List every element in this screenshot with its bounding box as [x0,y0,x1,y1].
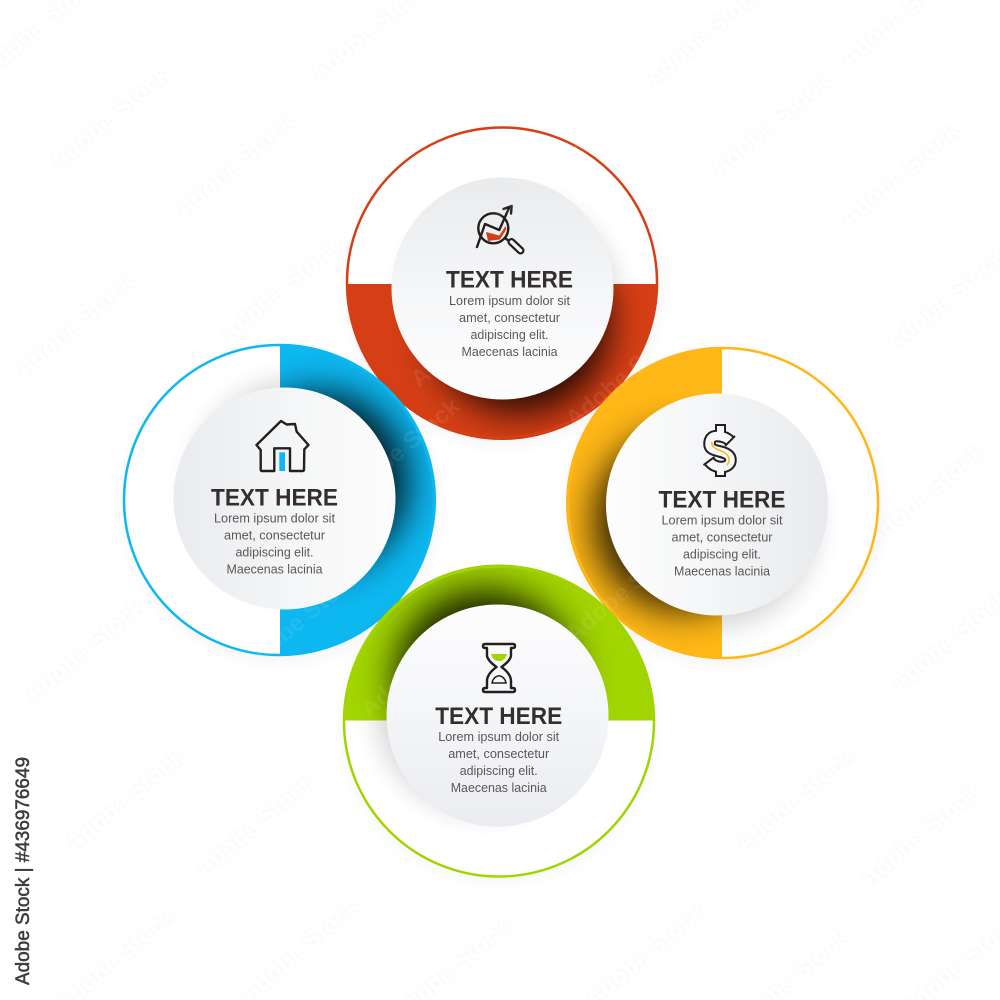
watermark pattern: Adobe Stock [170,107,301,223]
text block: Lorem ipsum dolor sit [662,512,783,528]
watermark overlay: Adobe Stock [560,532,691,648]
text block: adipiscing elit. [460,763,538,778]
text block: amet, consectetur [224,528,326,542]
watermark pattern: Adobe Stock [60,742,191,858]
watermark pattern: Adobe Stock [215,232,346,348]
icon: hourglass [483,644,515,692]
text block: amet, consectetur [459,310,561,325]
watermark pattern: Adobe Stock [860,437,991,553]
icon: house [256,421,308,471]
text block: Maecenas lacinia [451,780,547,795]
stock id side label: Adobe Stock | #436976649 [13,757,34,985]
text block [438,729,560,795]
watermark overlay: Adobe Stock [235,562,366,678]
watermark overlay: Adobe Stock [485,112,616,228]
panel: orange circle [566,347,880,663]
watermark pattern: Adobe Stock [10,267,141,383]
panel: green circle [343,564,655,881]
watermark overlay [235,112,691,723]
text block: Maecenas lacinia [462,344,558,359]
watermark overlay: Adobe Stock [355,607,486,723]
heading: TEXT HERE [658,486,786,514]
text block: adipiscing elit. [236,544,314,560]
icon: chart magnifier [477,206,520,250]
watermark overlay: Adobe Stock [560,317,691,433]
watermark pattern: Adobe Stock [45,60,176,176]
heading: TEXT HERE [435,703,562,730]
panel: blue circle [123,344,436,660]
text block: Lorem ipsum dolor sit [449,293,570,308]
text block: Maecenas lacinia [226,562,323,576]
panel: red circle [346,126,659,443]
text block: Lorem ipsum dolor sit [214,510,335,526]
text block: amet, consectetur [448,746,550,761]
text block [214,510,335,576]
watermark pattern: Adobe Stock [730,742,861,858]
text block: Lorem ipsum dolor sit [438,729,560,744]
watermark overlay: Adobe Stock [405,277,536,393]
watermark pattern: Adobe Stock [835,117,966,233]
watermark pattern: Adobe Stock [705,67,836,183]
text block: Maecenas lacinia [674,564,771,578]
watermark pattern: Adobe Stock [20,592,151,708]
text block: adipiscing elit. [683,546,761,562]
text block: adipiscing elit. [470,327,548,342]
text block [662,512,783,578]
heading: TEXT HERE [446,266,573,294]
watermark pattern: Adobe Stock [190,767,321,883]
text block: amet, consectetur [672,530,773,544]
text block [449,293,570,359]
icon: dollar sign [704,425,734,476]
watermark overlay: Adobe Stock [335,392,466,508]
watermark pattern: Adobe Stock [855,777,986,893]
heading: TEXT HERE [211,484,338,512]
